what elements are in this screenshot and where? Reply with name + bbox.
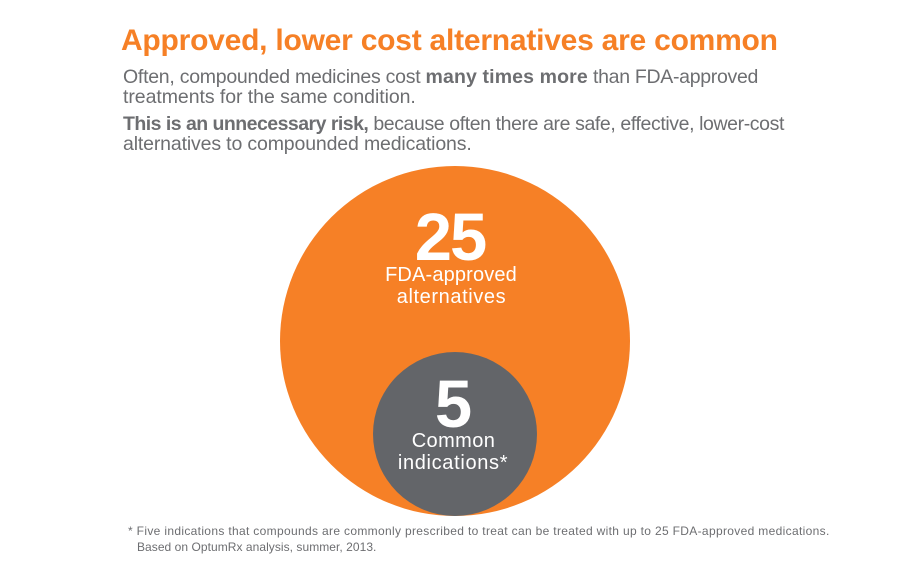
outer circle: FDA-approved alternatives: alternatives [397, 286, 506, 308]
intro text block: treatments for the same condition. [123, 86, 416, 108]
risk text block: alternatives to compounded medications. [123, 133, 472, 155]
footnote: * Five indications that compounds are commonly prescribed to treat can be treated with up to 25 FDA-approved medications. [128, 524, 830, 538]
title: Approved, lower cost alternatives are common [121, 24, 778, 57]
outer circle: FDA-approved alternatives: FDA-approved [385, 264, 517, 286]
risk text block: This is an unnecessary risk, because often there are safe, effective, lower-cost [123, 113, 784, 135]
inner circle: common indications: 5 [435, 367, 472, 442]
risk text block [123, 113, 784, 155]
inner circle: common indications: indications* [398, 452, 508, 474]
inner circle: common indications [373, 352, 537, 516]
intro text block: Often, compounded medicines cost many times more than FDA-approved [123, 66, 758, 88]
outer circle: FDA-approved alternatives: 25 [415, 200, 486, 275]
inner circle: common indications: Common [412, 430, 495, 452]
outer circle: FDA-approved alternatives [280, 166, 630, 516]
intro text block [123, 66, 758, 108]
footnote: Based on OptumRx analysis, summer, 2013. [137, 540, 376, 554]
footnote [128, 524, 830, 554]
